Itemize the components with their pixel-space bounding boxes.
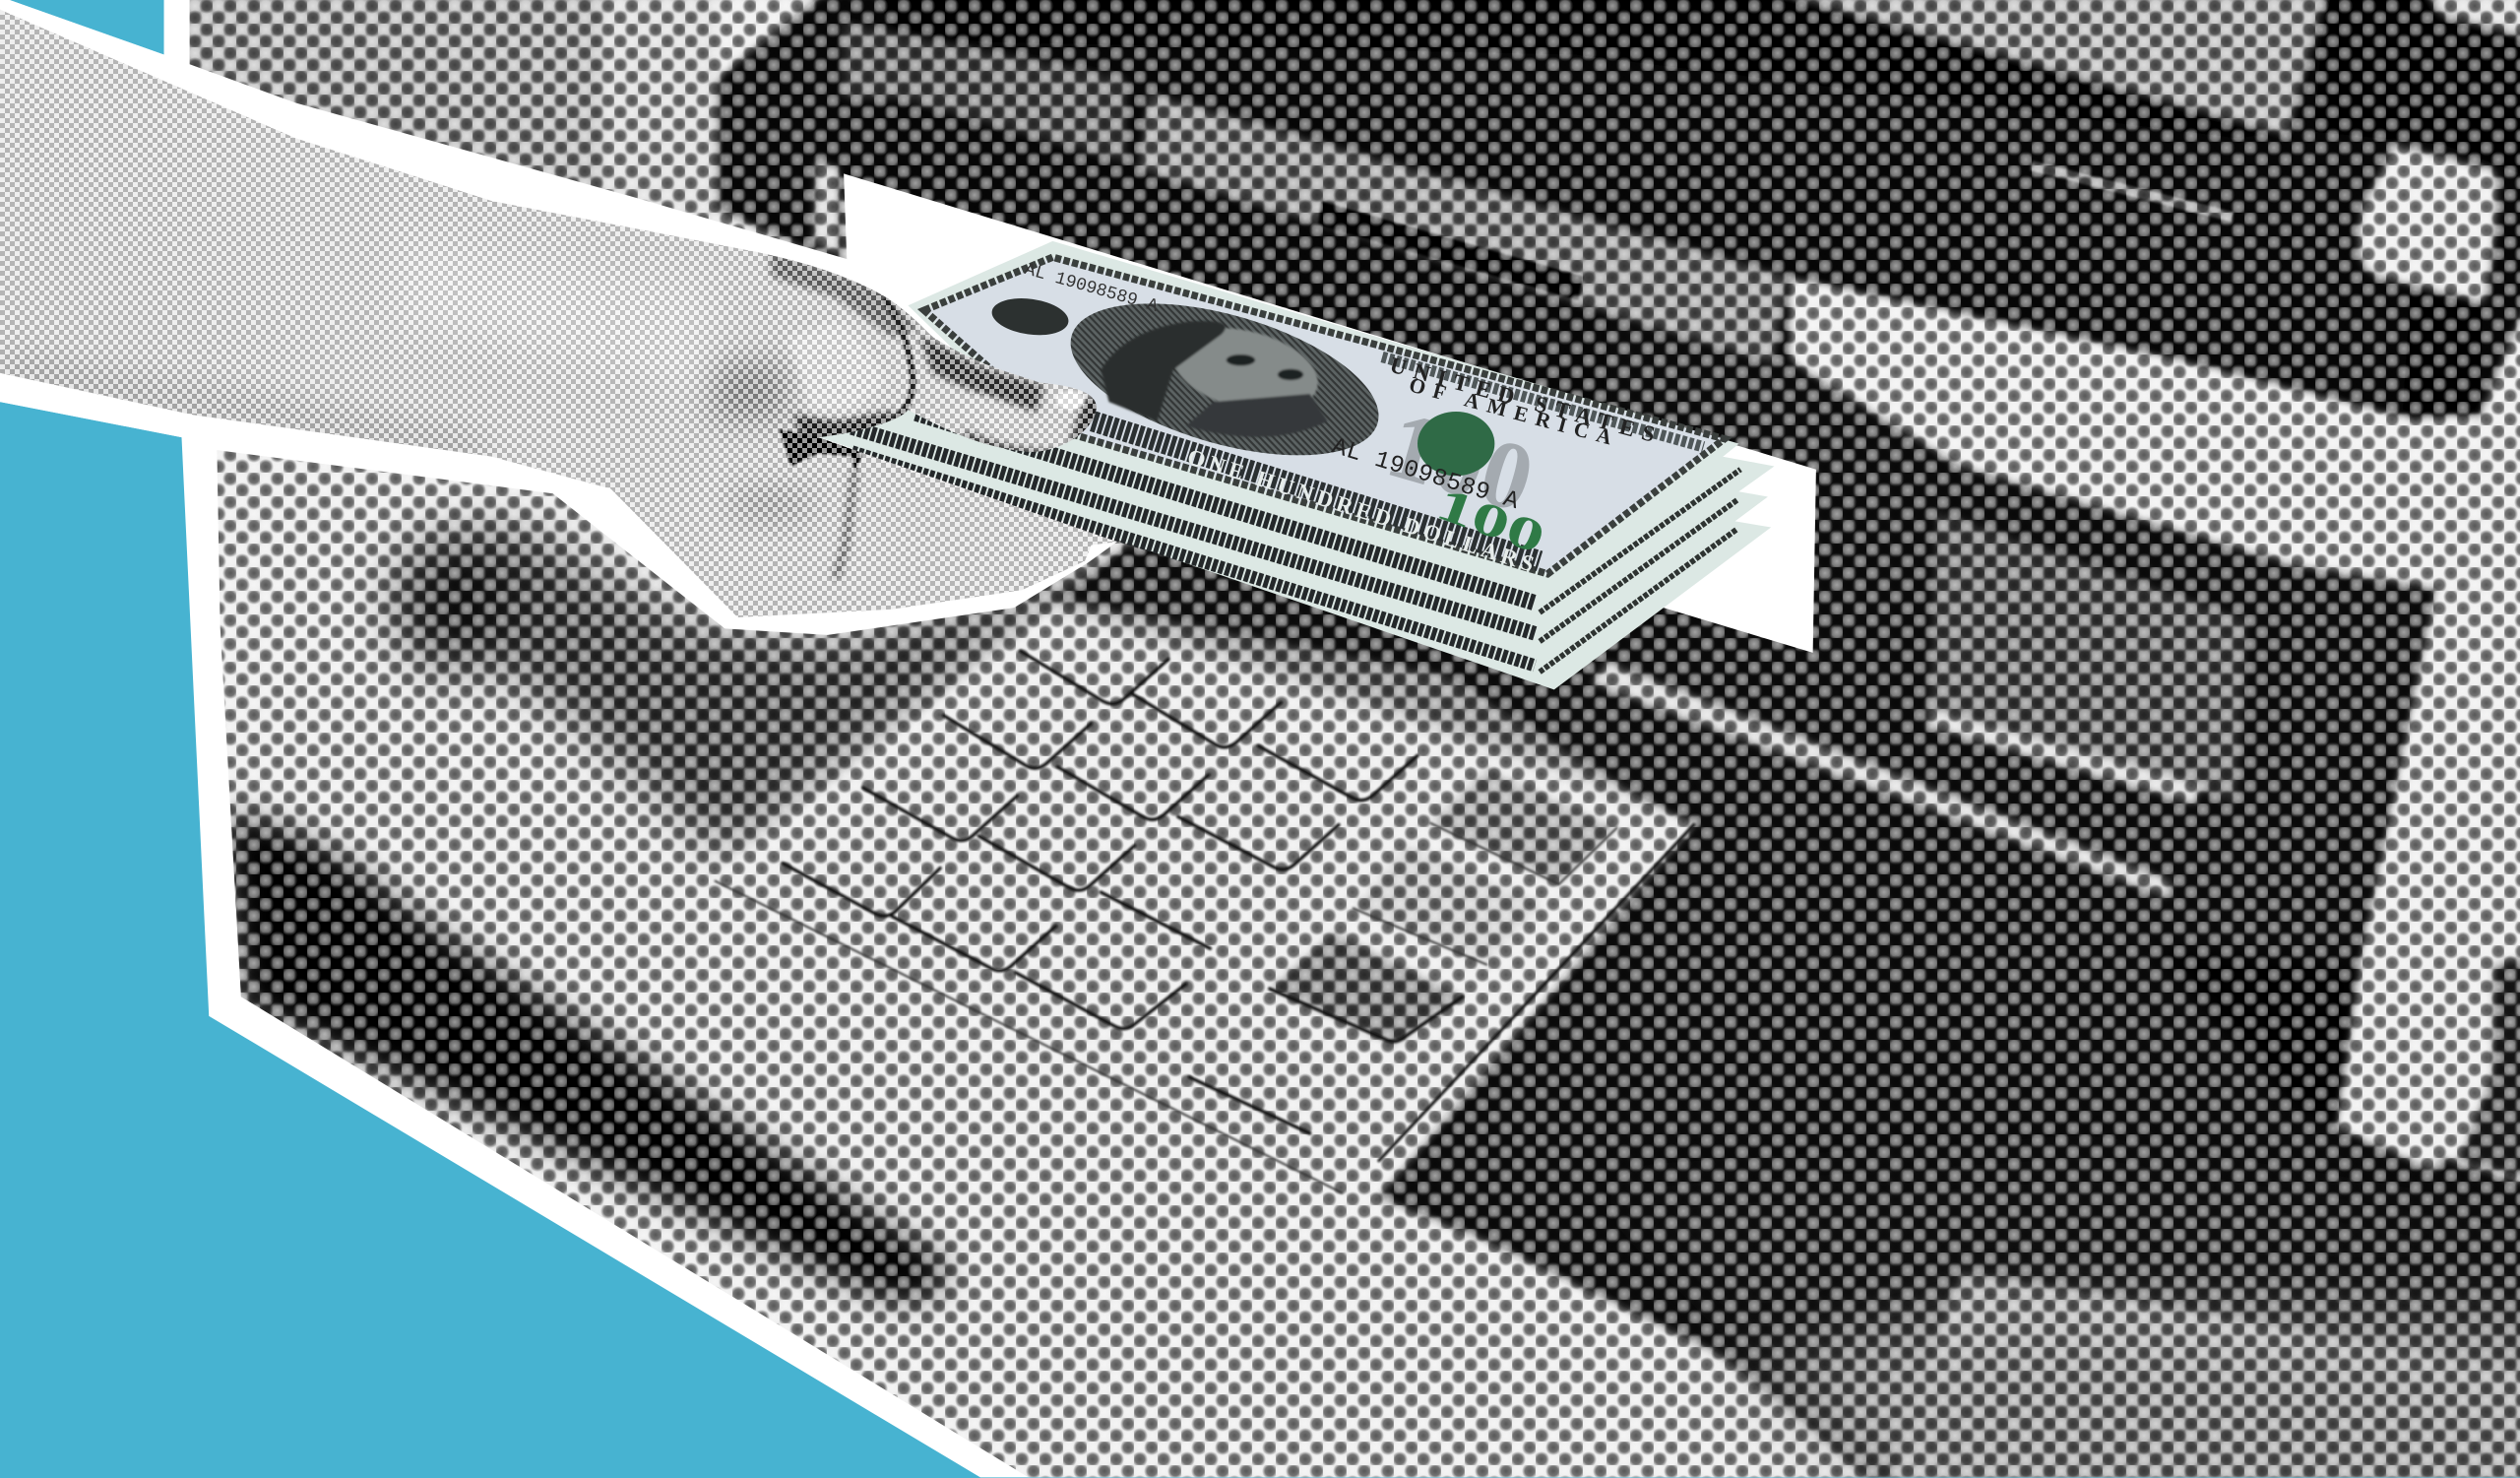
dark floor continuation <box>1771 1249 2518 1349</box>
portrait head <box>1101 314 1328 437</box>
black shadow by pillar <box>2154 948 2361 1126</box>
white paper slot behind cash <box>844 173 1816 653</box>
bill 2 <box>851 322 1774 623</box>
card reader plate <box>1138 94 1788 363</box>
upper wall, dark panels <box>189 0 2520 423</box>
portrait oval <box>1054 274 1395 485</box>
dark smudge behind keypad <box>394 528 1109 852</box>
serial number: AL 19098589 A <box>1328 434 1522 516</box>
right pillar <box>2339 193 2520 1171</box>
thumb joint crease <box>884 299 913 419</box>
bill 3 <box>828 353 1768 656</box>
chrome strips <box>1591 663 2172 897</box>
ghost 100 numerals: 100 <box>1376 391 1544 534</box>
upper right engraved band <box>1382 356 1704 447</box>
lower engraved band <box>1093 421 1540 561</box>
light sliver at slot left <box>813 161 839 257</box>
hand base tone <box>0 0 1149 668</box>
card slot <box>1318 201 1583 300</box>
keypad face <box>730 602 1699 898</box>
serial number upper: AL 19098589 A <box>1022 260 1161 317</box>
white outline around hand <box>0 0 1125 635</box>
mottled floor stain <box>1735 1286 2520 1478</box>
bill 1 top <box>908 241 1739 592</box>
sliver at right edge <box>2459 948 2520 1189</box>
green treasury seal <box>1418 412 1494 476</box>
keypad special keys <box>1270 768 1616 1045</box>
side button <box>2359 145 2496 302</box>
text: united states: UNITED STATES <box>1387 353 1658 447</box>
green denomination: 100 <box>1430 477 1551 563</box>
fist and thumb shading <box>770 249 1109 470</box>
thumbnail highlight <box>1056 391 1085 410</box>
crease of fist <box>780 429 861 473</box>
text: one hundred dollars: ONE HUNDRED DOLLARS <box>1184 444 1537 576</box>
machine light strip <box>1786 276 2480 427</box>
palm crease <box>836 470 855 579</box>
keypad key outlines <box>716 651 1694 1192</box>
hand fine halftone <box>0 10 1117 617</box>
hand holding cash <box>0 0 1149 668</box>
dark middle and floor <box>1061 305 2520 1478</box>
plate in dark region <box>1928 511 2246 803</box>
federal reserve seal <box>989 293 1071 340</box>
bill 4 bottom <box>820 386 1771 689</box>
stack of US 100 dollar bills <box>820 241 1774 689</box>
soft arm shading <box>0 241 810 518</box>
text: of america: OF AMERICA <box>1407 372 1615 450</box>
blurred finger at lower left <box>225 811 948 1302</box>
